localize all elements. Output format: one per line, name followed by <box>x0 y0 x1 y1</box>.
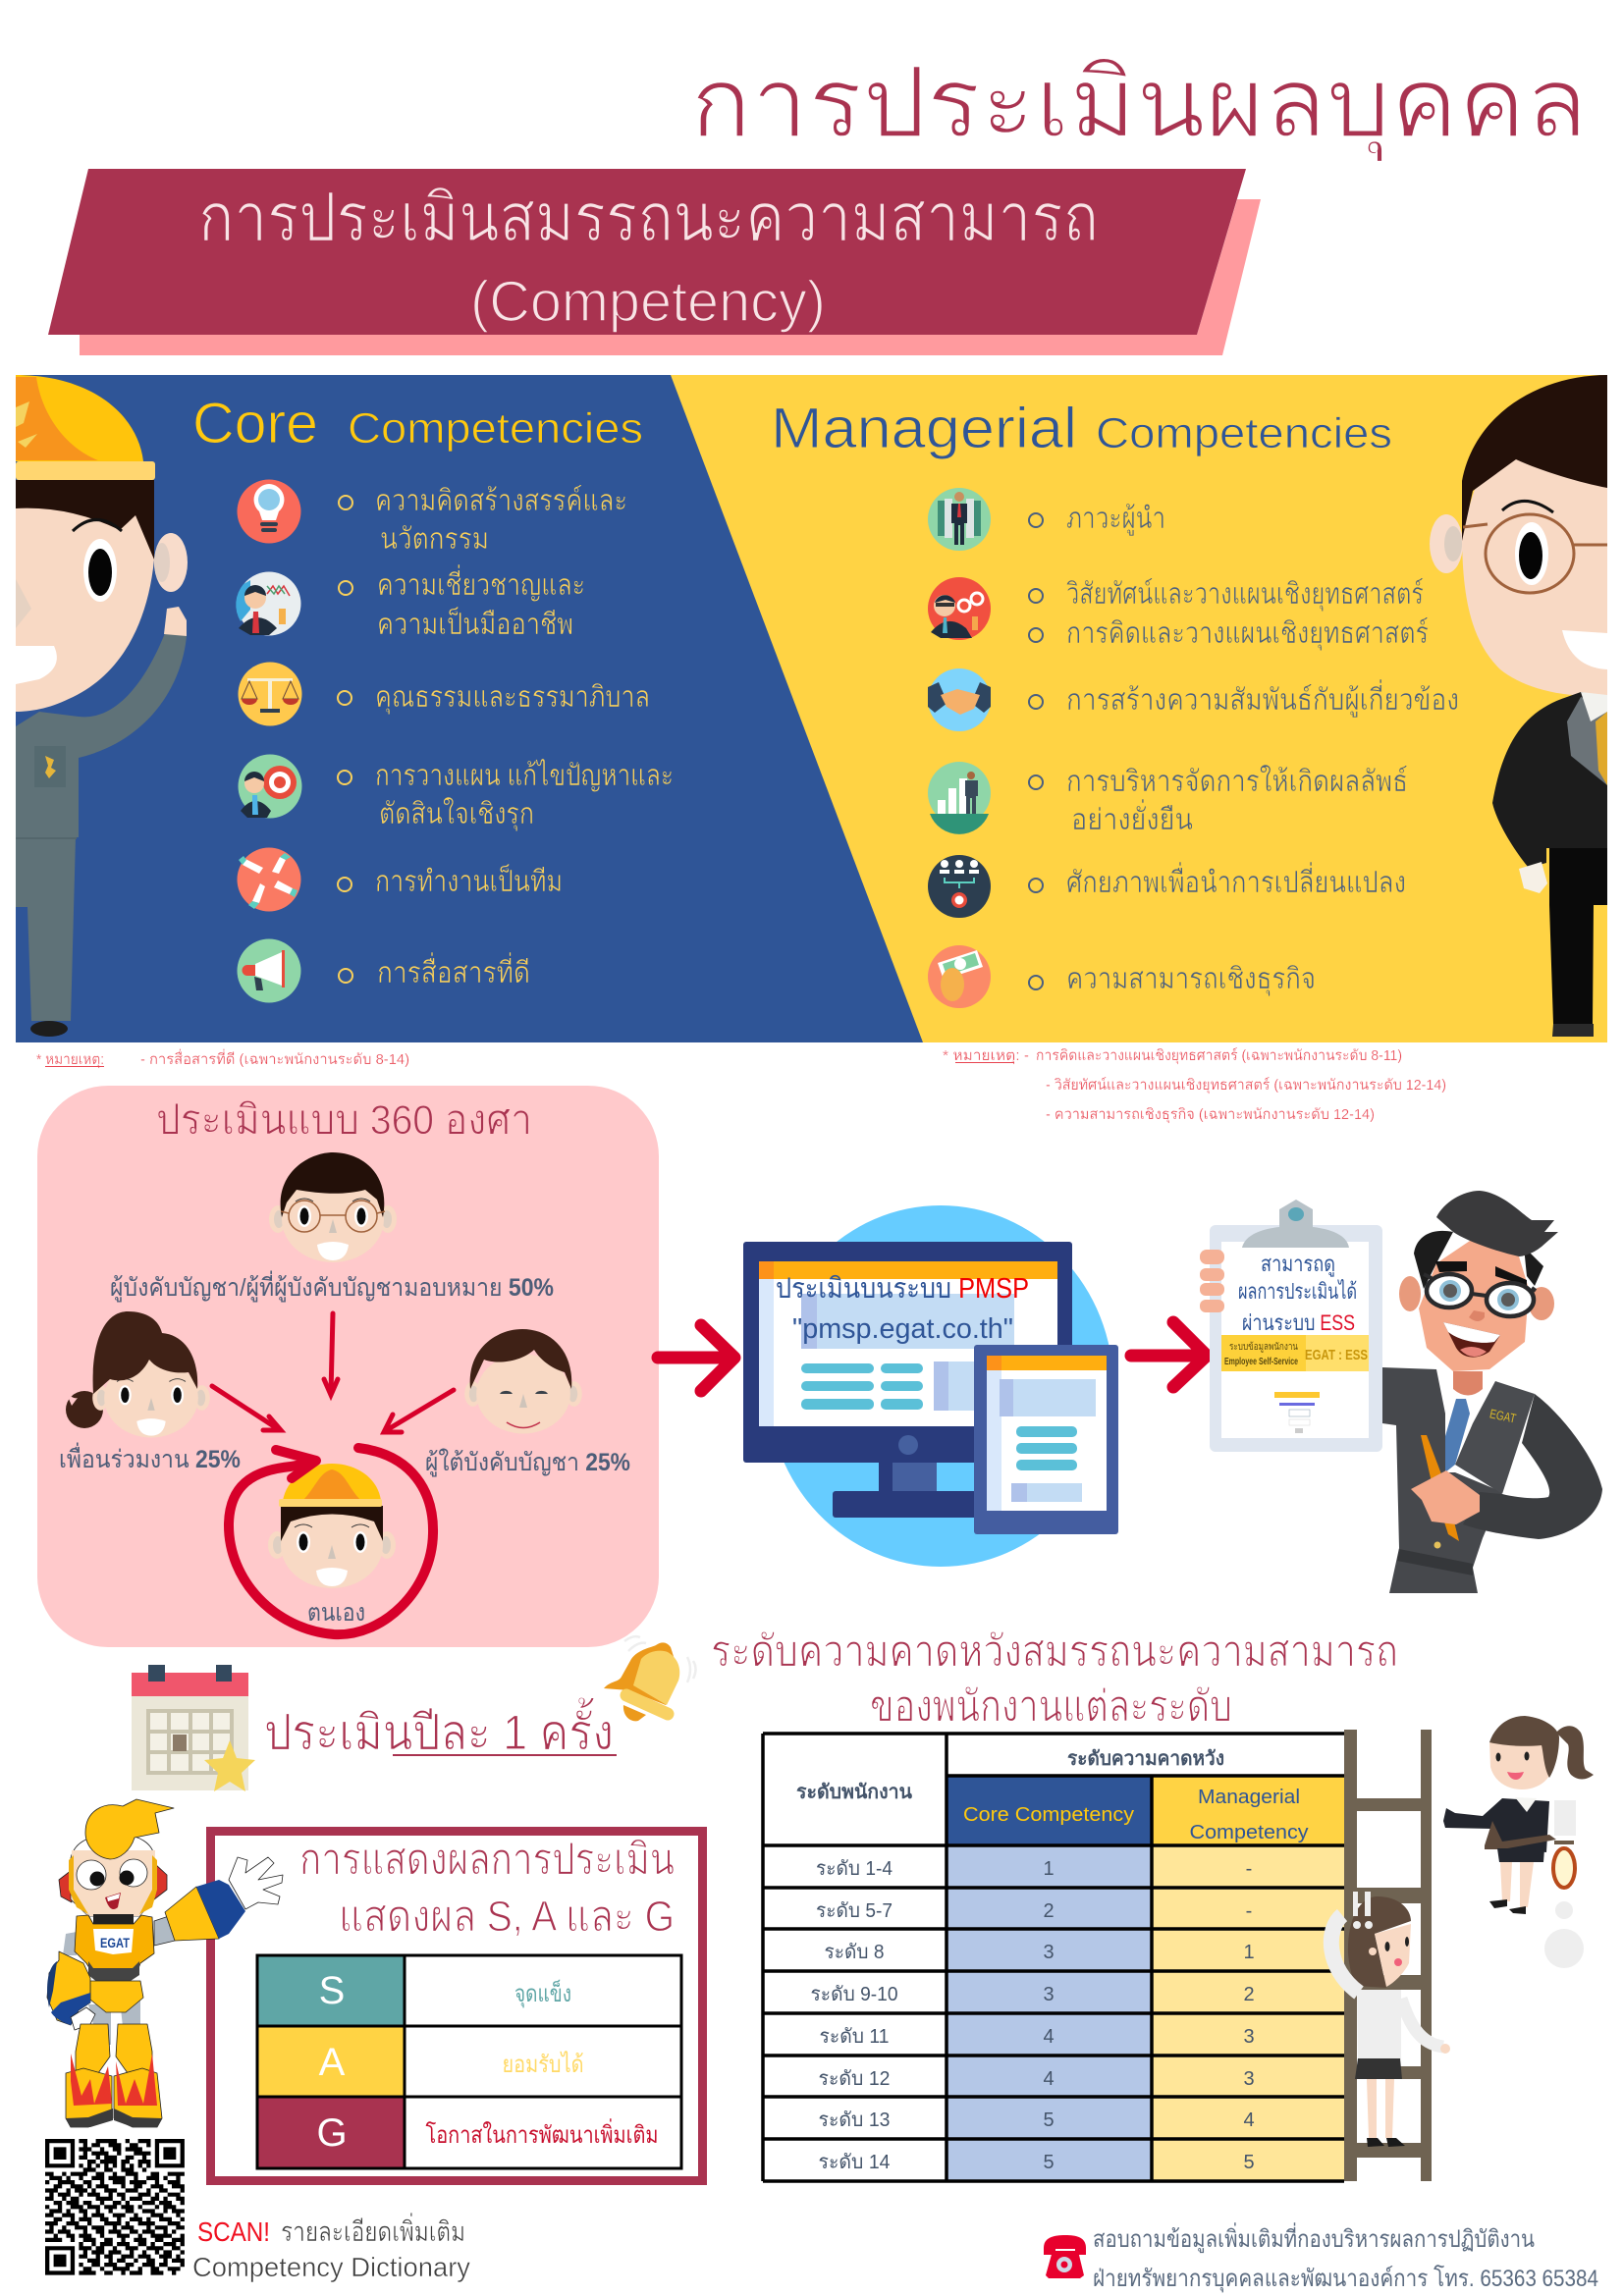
icon: money <box>928 945 991 1008</box>
table rows: - <box>1246 1858 1252 1880</box>
item: creativity and innovation: นวัตกรรม <box>380 523 489 556</box>
text: scan for details: Competency Dictionary <box>192 2252 470 2282</box>
item: business acumen: ความสามารถเชิงธุรกิจ <box>1066 963 1316 997</box>
illustration: engineer with hard hat <box>16 375 188 1037</box>
icon: calendar <box>132 1665 255 1791</box>
table rows: 5 <box>1043 2109 1055 2131</box>
heading: managerial competencies: Managerial <box>771 397 1077 460</box>
icon: creative thinking bulb <box>238 479 300 544</box>
note: core: * หมายเหตุ: <box>36 1051 104 1069</box>
table rows: - <box>1246 1900 1252 1922</box>
items: vision and strategic thinking <box>1029 577 1429 652</box>
title: การประเมินผลบุคคล <box>690 48 1588 163</box>
table rows: ระดับ 11 <box>819 2026 890 2048</box>
result table: A <box>319 2041 346 2084</box>
note: core <box>36 1048 409 1069</box>
illustration: smiling man in suit <box>1382 1191 1602 1593</box>
banner subheading: (Competency) <box>470 270 826 334</box>
face: subordinate <box>464 1329 582 1433</box>
illustration: smiling man in suit: EGAT <box>1488 1406 1517 1426</box>
ESS banner: Employee Self-Service <box>1224 1357 1298 1367</box>
table rows: 2 <box>1043 1900 1055 1922</box>
ESS banner: EGAT : ESS <box>1305 1347 1368 1363</box>
arrow: subordinate to self <box>384 1390 454 1432</box>
note: core: - การสื่อสารที่ดี (เฉพาะพนักงานระดับ 8-14) <box>140 1048 409 1068</box>
result table: ยอมรับได้ <box>503 2051 583 2078</box>
illustration: manager with glasses <box>1430 375 1607 1037</box>
note: managerial: - ความสามารถเชิงธุรกิจ (เฉพาะพนักงานระดับ 12-14) <box>1046 1106 1375 1124</box>
item: expertise and professionalism <box>339 564 585 641</box>
icon: handshake <box>928 668 991 731</box>
panel: competencies <box>16 375 1607 1042</box>
item: results management: การบริหารจัดการให้เกิดผลลัพธ์ <box>1066 765 1408 798</box>
table rows: ระดับ 13 <box>819 2109 890 2131</box>
table header: Managerial <box>1198 1787 1300 1808</box>
illustration: ladder <box>1344 1730 1432 2181</box>
item: communication <box>339 952 530 989</box>
heading: core competencies: Competencies <box>348 404 643 453</box>
table rows: ระดับ 5-7 <box>816 1900 893 1922</box>
item: teamwork <box>338 863 563 898</box>
face: colleague <box>66 1311 210 1437</box>
item: expertise and professionalism: ความเชี่ยวชาญและ <box>377 564 585 602</box>
result table: G <box>316 2111 348 2155</box>
icon: telephone <box>1044 2235 1086 2278</box>
label: colleague 25%: เพื่อนร่วมงาน 25% <box>59 1442 241 1473</box>
heading: expected competency levels: ของพนักงานแต่ละระดับ <box>870 1682 1232 1731</box>
text: scan for details <box>192 2213 470 2282</box>
system url text: "pmsp.egat.co.th" <box>792 1313 1013 1345</box>
table rows: ระดับ 1-4 <box>816 1858 893 1880</box>
table rows: 2 <box>1243 1984 1255 2005</box>
text: scan for details: SCAN! <box>197 2216 270 2247</box>
item: planning and problem solving <box>338 758 674 832</box>
note: managerial: * หมายเหตุ: - <box>943 1047 1029 1065</box>
table header: ระดับพนักงาน <box>796 1782 912 1803</box>
illustration: robot mascot <box>47 1799 283 2127</box>
text: assess once a year: ประเมินปีละ 1 ครั้ง <box>264 1697 614 1760</box>
note: managerial: - วิสัยทัศน์และวางแผนเชิงยุทธศาสตร์ (เฉพาะพนักงานระดับ 12-14) <box>1046 1077 1446 1095</box>
item: change leadership: ศักยภาพเพื่อนำการเปลี่ยนแปลง <box>1066 862 1406 899</box>
item: communication: การสื่อสารที่ดี <box>377 952 530 989</box>
table rows: 3 <box>1043 1942 1055 1963</box>
items: vision and strategic thinking: การคิดและวางแผนเชิงยุทธศาสตร์ <box>1066 616 1429 652</box>
table rows: 5 <box>1243 2152 1255 2173</box>
arrow: supervisor to self <box>324 1313 338 1395</box>
item: change leadership <box>1029 862 1406 899</box>
heading: managerial competencies: Competencies <box>1096 409 1392 457</box>
table rows: 1 <box>1243 1942 1255 1963</box>
table rows: 5 <box>1043 2152 1055 2173</box>
item: creativity and innovation: ความคิดสร้างสรรค์และ <box>375 484 627 517</box>
arrow: to ESS <box>1131 1322 1207 1387</box>
table rows: 3 <box>1243 2068 1255 2090</box>
result heading <box>299 1836 675 1941</box>
icon: strategic vision gears <box>928 577 991 640</box>
heading: 360 degree: ประเมินแบบ 360 องศา <box>156 1096 532 1143</box>
ESS banner: ระบบข้อมูลพนักงาน <box>1229 1341 1298 1353</box>
item: results management <box>1029 765 1408 836</box>
panel: result display <box>210 1832 703 2181</box>
table: expected levels <box>763 1734 1344 2181</box>
panel: 360 degree assessment <box>37 1086 659 1647</box>
heading: expected competency levels: ระดับความคาดหวังสมรรถนะความสามารถ <box>711 1628 1398 1676</box>
icon: bell <box>604 1636 695 1721</box>
table rows: ระดับ 8 <box>825 1942 884 1963</box>
illustration: clipboard with ESS result <box>1200 1200 1382 1452</box>
table header: Core Competency <box>963 1804 1134 1826</box>
arrow: colleague to self <box>212 1386 281 1430</box>
illustration: robot mascot: EGAT <box>100 1935 130 1950</box>
item: stakeholder relations: การสร้างความสัมพันธ์กับผู้เกี่ยวข้อง <box>1066 679 1459 718</box>
text: scan for details: รายละเอียดเพิ่มเติม <box>281 2213 465 2247</box>
clipboard text: ผลการประเมินได้ <box>1238 1279 1357 1304</box>
ESS banner <box>1221 1335 1369 1371</box>
clipboard text: ผ่านระบบ ESS <box>1242 1310 1355 1335</box>
face: supervisor <box>269 1152 397 1262</box>
heading: managerial competencies <box>771 397 1392 460</box>
table rows <box>811 1858 1255 2173</box>
result table: จุดแข็ง <box>514 1979 571 2008</box>
tablet <box>974 1345 1118 1534</box>
QR code <box>45 2139 185 2275</box>
item: ethics and governance: คุณธรรมและธรรมาภิบาล <box>375 681 650 716</box>
heading: core competencies: Core <box>192 392 318 455</box>
table rows: ระดับ 14 <box>819 2152 890 2173</box>
result heading: แสดงผล S, A และ G <box>339 1893 675 1941</box>
note: managerial: การคิดและวางแผนเชิงยุทธศาสตร์ (เฉพาะพนักงานระดับ 8-11) <box>1036 1047 1402 1065</box>
item: planning and problem solving: ตัดสินใจเชิงรุก <box>379 797 534 832</box>
icon: leading change <box>928 855 991 918</box>
table rows: ระดับ 9-10 <box>811 1984 897 2005</box>
icon: scales of justice <box>238 662 302 726</box>
text: contact details <box>1093 2222 1598 2293</box>
table header <box>796 1748 1308 1843</box>
arrow: self assessment loop <box>229 1448 433 1634</box>
item: leadership: ภาวะผู้นำ <box>1066 503 1165 536</box>
result table <box>257 1955 681 2168</box>
result heading: การแสดงผลการประเมิน <box>299 1836 675 1884</box>
banner <box>48 169 1261 355</box>
label: supervisor 50%: ผู้บังคับบัญชา/ผู้ที่ผู้บังคับบัญชามอบหมาย 50% <box>110 1270 554 1303</box>
table header: ระดับความคาดหวัง <box>1067 1748 1224 1770</box>
arrow: to system <box>658 1325 734 1391</box>
item: stakeholder relations <box>1029 679 1459 718</box>
table rows: 3 <box>1243 2026 1255 2048</box>
result table: โอกาสในการพัฒนาเพิ่มเติม <box>426 2118 658 2149</box>
item: leadership <box>1029 503 1165 536</box>
login form <box>1274 1392 1320 1433</box>
table rows: 3 <box>1043 1984 1055 2005</box>
illustration: woman climbing ladder <box>1331 1892 1450 2147</box>
face: self with helmet <box>268 1464 396 1588</box>
clipboard text: สามารถดู <box>1261 1252 1335 1277</box>
monitor <box>743 1242 1072 1518</box>
illustration: PMSP system screens <box>743 1205 1118 1567</box>
text: contact details: สอบถามข้อมูลเพิ่มเติมที่กองบริหารผลการปฏิบัติงาน <box>1093 2222 1535 2254</box>
item: expertise and professionalism: ความเป็นมืออาชีพ <box>377 606 573 641</box>
icon: results chart <box>928 762 991 834</box>
clipboard text <box>1238 1252 1357 1335</box>
system name text: ประเมินบนระบบ PMSP <box>776 1273 1029 1305</box>
table rows: 1 <box>1043 1858 1055 1880</box>
item: teamwork: การทำงานเป็นทีม <box>375 863 563 898</box>
result table: S <box>319 1969 345 2012</box>
heading: core competencies <box>192 392 643 455</box>
item: results management: อย่างยั่งยืน <box>1071 799 1193 836</box>
note: managerial <box>943 1047 1446 1124</box>
table rows: ระดับ 12 <box>819 2068 890 2090</box>
label: self: ตนเอง <box>307 1599 365 1627</box>
icon: expertise <box>236 571 300 636</box>
table rows: 4 <box>1243 2109 1255 2131</box>
items: vision and strategic thinking: วิสัยทัศน์และวางแผนเชิงยุทธศาสตร์ <box>1066 577 1424 613</box>
item: planning and problem solving: การวางแผน แก้ไขปัญหาและ <box>375 758 674 792</box>
illustration: woman on top of ladder <box>1443 1716 1594 1968</box>
icon: leadership <box>928 488 991 551</box>
table header: Competency <box>1190 1822 1308 1843</box>
banner heading: การประเมินสมรรถนะความสามารถ <box>198 181 1099 255</box>
table rows: 4 <box>1043 2068 1055 2090</box>
icon: teamwork hands <box>238 848 300 911</box>
icon: megaphone <box>238 938 300 1003</box>
icon: target planning <box>238 754 302 819</box>
table rows: 4 <box>1043 2026 1055 2048</box>
heading: expected competency levels <box>711 1628 1398 1731</box>
label: subordinate 25%: ผู้ใต้บังคับบัญชา 25% <box>425 1448 630 1477</box>
item: creativity and innovation <box>339 484 627 556</box>
